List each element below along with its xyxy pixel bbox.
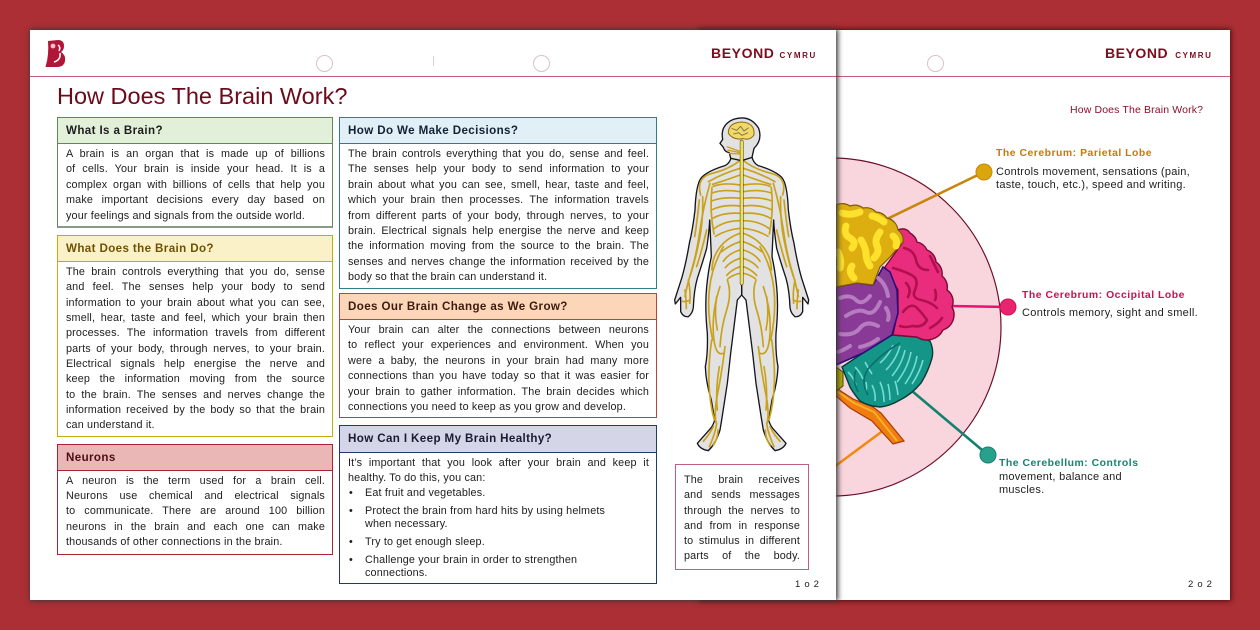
caption box: and from in response bbox=[684, 520, 800, 532]
label: parietal lobe: The Cerebrum: Parietal Lobe bbox=[996, 148, 1152, 159]
panel: what does the brain do: to the brain. The senses and nerves change the bbox=[66, 389, 325, 401]
panel: what is a brain: complex organ with billions of cells that help you bbox=[66, 179, 325, 191]
page number: 2 o 2 bbox=[1188, 579, 1213, 590]
heading bbox=[340, 118, 656, 144]
brain stem bbox=[836, 388, 904, 444]
caption box: The brain receives bbox=[684, 474, 800, 486]
title: How Does The Brain Work? bbox=[57, 83, 347, 109]
occipital lobe: pink bbox=[885, 229, 954, 340]
label: cerebellum: The Cerebellum: Controls bbox=[999, 458, 1138, 469]
panel: does our brain change: Your brain can alter the connections between neurons bbox=[348, 324, 649, 336]
heading: How Can I Keep My Brain Healthy? bbox=[348, 432, 552, 445]
panel: what is a brain bbox=[57, 117, 333, 228]
panel: neurons: to communicate. There are around 100 billion bbox=[66, 505, 325, 517]
logo: bird mark bbox=[46, 40, 66, 67]
panel: what does the brain do: processes. The information travels from different bbox=[66, 327, 325, 339]
page 1: text sheet bbox=[30, 30, 836, 600]
label: occipital lobe bbox=[1022, 290, 1198, 319]
panel: what is a brain: of cells. Your brain is inside your head. It is a bbox=[66, 163, 325, 175]
panel: keep brain healthy: Try to get enough sleep. bbox=[365, 536, 485, 548]
punch holes bbox=[316, 55, 333, 72]
panel: keep brain healthy bbox=[339, 425, 657, 584]
panel: what is a brain: your feelings and signals from the outside world. bbox=[66, 210, 305, 222]
panel: how do we make decisions bbox=[339, 117, 657, 289]
connector dots bbox=[976, 164, 1016, 463]
panel: keep brain healthy: Protect the brain from hard hits by using helmets bbox=[365, 505, 605, 517]
panel: how do we make decisions: brain. Electrical signals help energise the nerve and keep bbox=[348, 225, 649, 237]
panel: how do we make decisions: The brain controls everything that you do, sense and feel. bbox=[348, 148, 649, 160]
panel: what does the brain do: and feel. The senses help your body to send bbox=[66, 281, 325, 293]
panel: what does the brain do: smell, hear, taste and feel, which your brain then bbox=[66, 312, 325, 324]
label: occipital lobe: The Cerebrum: Occipital Lobe bbox=[1022, 290, 1185, 301]
panel: does our brain change: your brain to gather information. The brain decides which bbox=[348, 386, 649, 398]
olive section bbox=[836, 367, 843, 391]
frontal lobe: purple bbox=[836, 267, 898, 365]
heading: What Is a Brain? bbox=[66, 124, 163, 137]
panel: does our brain change: connections you need to keep as you grow and develop. bbox=[348, 401, 626, 413]
panel: how do we make decisions: the information moving from the source to the brain. The bbox=[348, 240, 649, 252]
panel: how do we make decisions: which your brain then processes. The information travels bbox=[348, 194, 649, 206]
panel: what does the brain do: information received by the body so that the brain bbox=[66, 404, 325, 416]
panel: keep brain healthy: • bbox=[349, 487, 353, 499]
panel: what is a brain: make important decisions every day based on bbox=[66, 194, 325, 206]
label: occipital lobe: Controls memory, sight and smell. bbox=[1022, 307, 1198, 319]
figure: human nervous system bbox=[674, 117, 810, 452]
panel: neurons bbox=[57, 444, 333, 555]
head bbox=[720, 118, 760, 161]
header rule bbox=[700, 76, 1230, 77]
panel: keep brain healthy: Challenge your brain in order to strengthen bbox=[365, 554, 577, 566]
panel: keep brain healthy: It’s important that you look after your brain and keep it bbox=[348, 457, 649, 469]
panel: how do we make decisions: from different parts of your body, through nerves, to your bbox=[348, 210, 649, 222]
panel: how do we make decisions: The senses help your body to send information to your bbox=[348, 163, 649, 175]
panel: what is a brain: A brain is an organ that is made up of billions bbox=[66, 148, 325, 160]
panel: how do we make decisions: body so that the brain can understand it. bbox=[348, 271, 547, 283]
logo: Beyond Cymru: BEYOND CYMRU bbox=[711, 45, 817, 61]
pink semicircle bbox=[663, 158, 1001, 496]
panel: does our brain change: to reflect your experiences and environment. When you bbox=[348, 339, 649, 351]
heading: How Do We Make Decisions? bbox=[348, 124, 518, 137]
panel: what does the brain do: information to your brain about what you can see, bbox=[66, 297, 325, 309]
caption box: to stimulus in different bbox=[684, 535, 800, 547]
caption box: parts of the body. bbox=[684, 550, 800, 562]
caption box: through the nerves to bbox=[684, 505, 800, 517]
heading bbox=[58, 118, 332, 144]
panel: does our brain change: were a baby, the neurons in your brain had many more bbox=[348, 355, 649, 367]
brain bbox=[728, 122, 754, 139]
page number: 1 o 2 bbox=[795, 579, 820, 590]
cerebellum: teal bbox=[842, 335, 933, 407]
label: parietal lobe: taste, touch, etc.), speed and writing. bbox=[996, 179, 1186, 191]
heading bbox=[340, 294, 656, 320]
panel: keep brain healthy: • bbox=[349, 554, 353, 566]
heading bbox=[58, 445, 332, 471]
panel: how do we make decisions: brain about what you can see, smell, hear, taste and feel, bbox=[348, 179, 649, 191]
panel: keep brain healthy: when necessary. bbox=[365, 518, 448, 530]
spinal cord bbox=[736, 142, 747, 283]
header rule bbox=[30, 76, 836, 77]
label: parietal lobe bbox=[996, 148, 1190, 191]
parietal lobe: yellow bbox=[836, 204, 903, 287]
panel: what does the brain do: parts of your body, through nerves, to your brain. bbox=[66, 343, 325, 355]
heading bbox=[340, 426, 656, 453]
heading: Neurons bbox=[66, 451, 116, 464]
panel: does our brain change: connections than you have today so that it was easier for bbox=[348, 370, 649, 382]
panel: what does the brain do bbox=[57, 235, 333, 437]
heading: What Does the Brain Do? bbox=[66, 242, 214, 255]
small page title: How Does The Brain Work? bbox=[1070, 104, 1203, 116]
heading: Does Our Brain Change as We Grow? bbox=[348, 300, 568, 313]
label: cerebellum bbox=[999, 458, 1138, 496]
panel: keep brain healthy: connections. bbox=[365, 567, 428, 579]
page 2: brain diagram sheet bbox=[700, 30, 1230, 600]
caption box bbox=[675, 464, 809, 570]
panel: what does the brain do: The brain controls everything that you do, sense bbox=[66, 266, 325, 278]
panel: neurons: thousands of other connections in the brain. bbox=[66, 536, 283, 548]
panel: what does the brain do: keep the information moving from the source bbox=[66, 373, 325, 385]
panel: does our brain change bbox=[339, 293, 657, 418]
panel: keep brain healthy: Eat fruit and vegetables. bbox=[365, 487, 485, 499]
panel: neurons: neurons in the brain and each one can make bbox=[66, 521, 325, 533]
panel: keep brain healthy: • bbox=[349, 536, 353, 548]
panel: keep brain healthy: healthy. To do this, you can: bbox=[348, 472, 486, 484]
panel: how do we make decisions: senses and nerves change the information received by the bbox=[348, 256, 649, 268]
panel: what does the brain do: Electrical signals help energise the nerve and bbox=[66, 358, 325, 370]
panel: keep brain healthy: • bbox=[349, 505, 353, 517]
label: cerebellum: movement, balance and bbox=[999, 471, 1122, 483]
logo: Beyond Cymru: BEYOND CYMRU bbox=[1105, 45, 1213, 61]
label: parietal lobe: Controls movement, sensations (pain, bbox=[996, 166, 1190, 178]
label: cerebellum: muscles. bbox=[999, 484, 1044, 496]
caption box: and sends messages bbox=[684, 489, 800, 501]
panel: neurons: Neurons use chemical and electrical signals bbox=[66, 490, 325, 502]
connector lines bbox=[830, 172, 1008, 470]
panel: neurons: A neuron is the term used for a brain cell. bbox=[66, 475, 325, 487]
heading bbox=[58, 236, 332, 262]
panel: what does the brain do: can understand it. bbox=[66, 419, 155, 431]
punch hole bbox=[927, 55, 944, 72]
